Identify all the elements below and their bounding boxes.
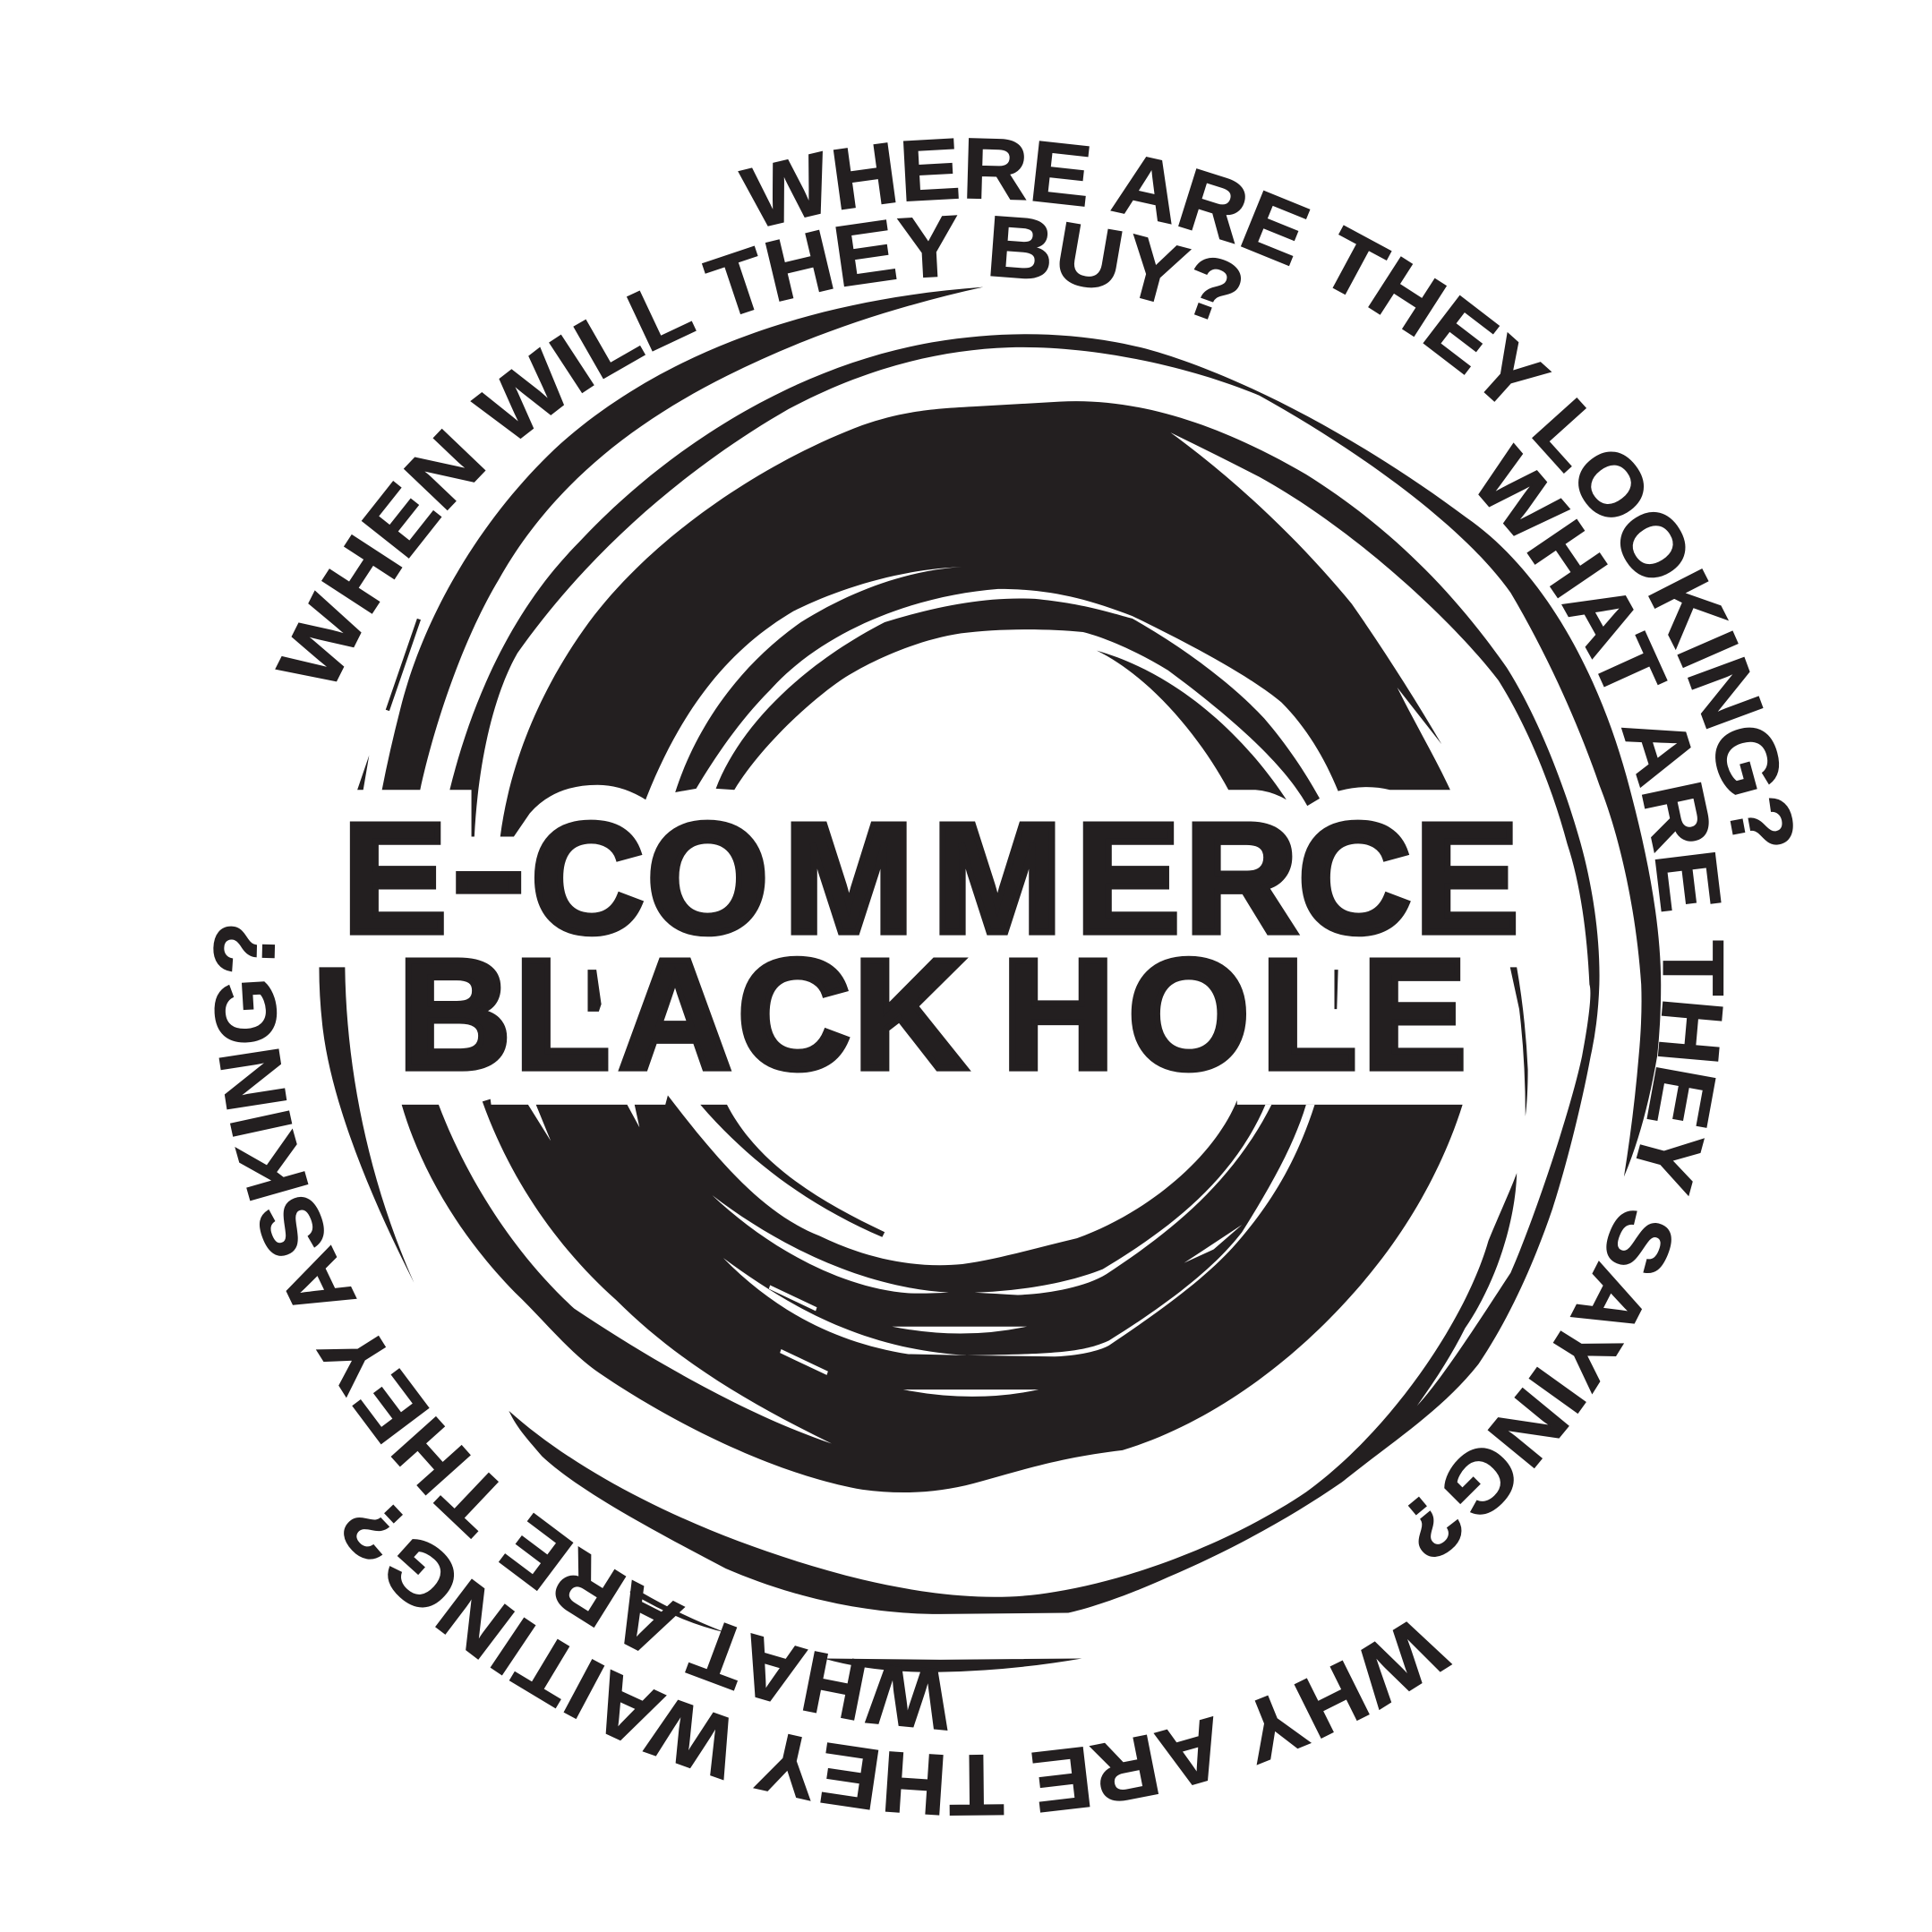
swirl: right thin sliver [1510, 967, 1528, 1116]
swirl: lower mass [402, 1096, 1463, 1492]
slit: left crescent [712, 1195, 949, 1294]
ring text: what are they asking: WHAT ARE THEY ASKING? [213, 926, 947, 1731]
swirl: thin left sliver [386, 619, 421, 711]
slit: first slash [769, 1285, 816, 1311]
slit: right crescent [975, 1105, 1271, 1295]
swirl: bottom thin sliver [824, 1658, 1081, 1672]
swirl: inner ring [716, 598, 1320, 806]
slit: second left crescent [723, 1258, 967, 1355]
black hole swirl [319, 287, 1661, 1672]
slit: outer right gap [967, 1105, 1314, 1356]
swirl: lower inner sliver [700, 1105, 885, 1237]
ring text: when will they buy: WHEN WILL THEY BUY? [275, 215, 1241, 682]
slit: second lens [903, 1389, 1039, 1397]
title [343, 783, 1519, 1102]
swirl: second ring over the top [449, 334, 1661, 1176]
swirl: short diagonal sliver [629, 1588, 726, 1633]
swirl: inner crescent [1097, 651, 1287, 799]
swirl highlights: white slits [712, 1105, 1314, 1397]
swirl: outer left arc [382, 287, 983, 790]
swirl: remnant between L and A [587, 970, 602, 1012]
title line one: E [343, 791, 447, 966]
swirl: small left tip [357, 756, 369, 790]
slit: small triangle [1184, 1225, 1242, 1263]
slit: first lens [892, 1327, 1027, 1334]
title hyphen bar [456, 871, 521, 894]
swirl: main mass and band around the bottom [500, 401, 1600, 1614]
slit: second slash [780, 1349, 828, 1375]
ring text: why are they waiting: WHY ARE THEY WAITING? [344, 1504, 1452, 1816]
title line one: - [462, 783, 514, 958]
ring text: what are they saying: WHAT ARE THEY SAYING? [1407, 442, 1724, 1557]
swirl: remnant beside L of hole [1335, 970, 1338, 1009]
title line two: BLACK HOLE [398, 928, 1466, 1102]
ring text: where are they looking: WHERE ARE THEY LOOKING? [738, 138, 1793, 845]
title line one: COMMERCE [531, 791, 1519, 966]
swirl: long left sliver [319, 967, 414, 1283]
